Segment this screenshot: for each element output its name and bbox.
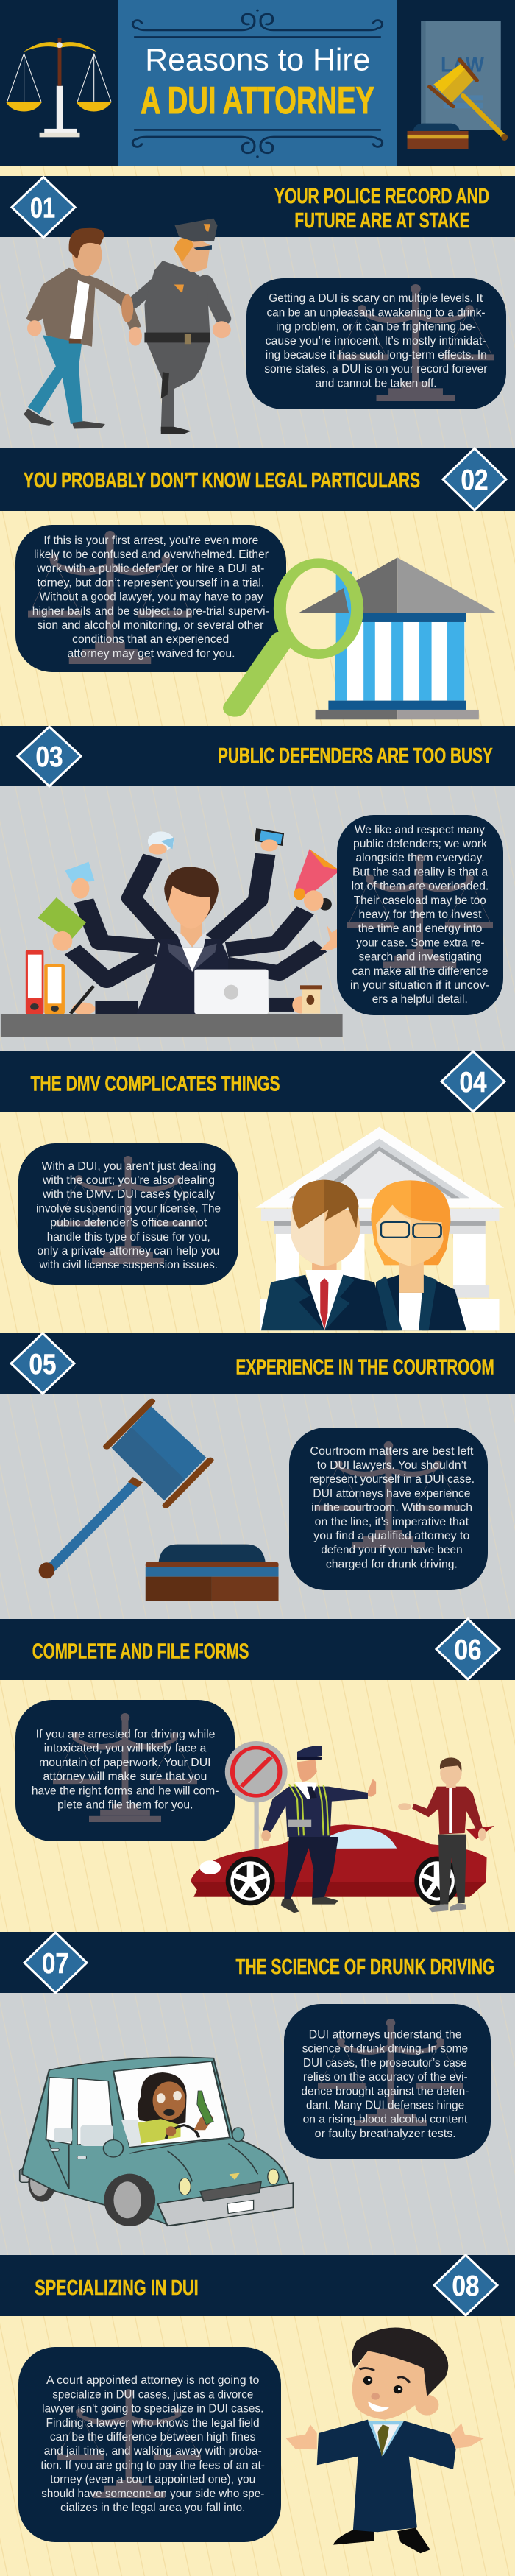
text bubble: and jail time, and walking away with proba- (44, 2445, 262, 2457)
text bubble: If this is your first arrest, you’re even more (43, 534, 258, 547)
text bubble: tion. If you are going to pay the fees of an at- (40, 2459, 265, 2471)
title (141, 43, 374, 122)
watermark: scales (28, 531, 192, 664)
text bubble: on the line, it’s imperative that (315, 1516, 469, 1528)
text bubble: attorney may get waived for you. (68, 647, 235, 660)
panel: reason 6 (0, 1619, 515, 1932)
text bubble: can be an unpleasant awakening to a drink- (266, 306, 486, 319)
panel: reason 5 (0, 1333, 515, 1619)
text bubble: some states, a DUI is on your record forever (264, 363, 487, 375)
text bubble: specialize in DUI cases, just as a divorce (52, 2388, 253, 2401)
badge: 02 (443, 448, 506, 510)
text bubble: DUI cases, the prosecutor’s case (303, 2057, 467, 2069)
icon: scales of justice (6, 38, 112, 137)
text bubble: on a rising blood alcohol content (303, 2114, 468, 2126)
badge: 04: 04 (459, 1067, 487, 1098)
text bubble: higher bails and be subject to pre-trial supervi- (32, 605, 269, 618)
panel: reason 4 (0, 1051, 515, 1333)
text bubble (15, 1700, 235, 1841)
badge: 06 (436, 1619, 500, 1679)
watermark: scales (337, 284, 494, 401)
text bubble: lot of them are overloaded. (352, 881, 489, 893)
text bubble: attorney will make sure that you (43, 1771, 207, 1783)
text bubble: alongside them everyday. (356, 852, 484, 864)
text bubble: conditions that an experienced (72, 633, 229, 646)
text bubble (246, 278, 506, 409)
badge: 06: 06 (455, 1634, 481, 1666)
text bubble: search and investigating (359, 951, 482, 964)
text bubble: only a private attorney can help you (37, 1245, 219, 1257)
illustration: gavel and block (39, 1401, 279, 1601)
title ornament: top flourish (132, 10, 383, 38)
text bubble: torney, but don’t represent yourself in a trial. (37, 576, 264, 589)
watermark: scales (316, 1441, 461, 1548)
icon: law book and gavel (408, 21, 508, 149)
text bubble: ing problem, or it can be frightening be- (276, 321, 476, 334)
text bubble (337, 815, 503, 1015)
text bubble: involve suspending your license. The (36, 1202, 221, 1215)
text bubble: or faulty breathalyzer tests. (315, 2128, 456, 2140)
header banner (0, 0, 515, 166)
text bubble: should have someone on your side who spe- (41, 2488, 264, 2500)
text bubble: public defenders; we work (353, 838, 487, 850)
text bubble: mountain of paperwork. Your DUI (39, 1757, 211, 1769)
panel: reason 7 (0, 1932, 515, 2255)
text bubble: If you are arrested for driving while (36, 1729, 216, 1740)
title: Reasons to Hire (145, 43, 370, 78)
badge: 07 (24, 1933, 87, 1993)
text bubble (284, 2004, 491, 2159)
text bubble: Their caseload may be too (354, 894, 486, 907)
title ornament: bottom flourish (132, 130, 383, 158)
text bubble: you find a qualified attorney to (313, 1530, 469, 1542)
text bubble: work with a public defender or hire a DUI at- (36, 562, 264, 575)
illustration: man and police officer (24, 219, 231, 434)
badge: 02: 02 (461, 465, 489, 496)
text bubble: can be the difference between high fines (50, 2431, 256, 2443)
panel: reason 1 (0, 166, 515, 448)
watermark: scales (53, 1713, 197, 1822)
illustration: multitasking attorney at desk (1, 828, 343, 1037)
watermark: scales (57, 2389, 201, 2498)
text bubble: lawyer isn't going to specialize in DUI cases. (42, 2403, 263, 2416)
text bubble: dant. Many DUI defenses hinge (306, 2100, 464, 2111)
badge: 04 (441, 1051, 505, 1112)
text bubble: have the right forms and he will com- (32, 1785, 219, 1797)
badge: 05 (11, 1333, 74, 1394)
badge: 01: 01 (30, 193, 55, 224)
text bubble: ing because it has such long-term effects. In (266, 349, 487, 361)
text bubble: dence brought against the defen- (301, 2085, 469, 2097)
text bubble: DUI attorneys have experience (313, 1487, 470, 1500)
text bubble: cializes in the legal area you fall into. (60, 2502, 245, 2514)
text bubble: With a DUI, you aren’t just dealing (42, 1160, 216, 1173)
text bubble: in the courtroom. With so much (311, 1502, 472, 1514)
badge: 05: 05 (29, 1349, 56, 1380)
panel: reason 8 (0, 2255, 515, 2576)
text bubble: intoxicated, you will likely face a (44, 1743, 207, 1755)
text bubble: plete and file them for you. (57, 1799, 193, 1811)
badge: 07: 07 (42, 1948, 69, 1980)
text bubble: But the sad reality is that a (352, 866, 488, 878)
text bubble: defend you if you have been (321, 1544, 463, 1556)
illustration: smiling attorney in robe (285, 2327, 484, 2553)
text bubble: science of drunk driving. In some (302, 2043, 468, 2055)
illustration: courthouse and magnifying glass (235, 557, 496, 719)
watermark: scales (347, 854, 493, 968)
watermark: scales (56, 1156, 200, 1264)
text bubble: to DUI lawyers. You shouldn’t (317, 1459, 467, 1472)
text bubble: sion and alcohol monitoring, or several other (37, 619, 263, 632)
text bubble: ers a helpful detail. (372, 993, 468, 1006)
title: A DUI ATTORNEY (141, 80, 374, 122)
badge: 03: 03 (35, 741, 63, 773)
text bubble: Without a good lawyer, you may have to pay (40, 591, 263, 604)
text bubble: DUI attorneys understand the (309, 2029, 462, 2041)
text bubble (289, 1428, 488, 1590)
badge: 08 (434, 2255, 497, 2315)
text bubble: with the DMV. DUI cases typically (42, 1188, 215, 1201)
text bubble: in your situation if it uncov- (350, 979, 489, 992)
text bubble: charged for drunk driving. (326, 1558, 458, 1570)
heading: COMPLETE AND FILE FORMS (32, 1640, 249, 1663)
text bubble: relies on the accuracy of the evi- (303, 2071, 468, 2083)
badge: 03 (18, 727, 81, 786)
text bubble: represent yourself in a DUI case. (309, 1473, 475, 1486)
text bubble: cause you’re innocent. It’s mostly intimidat- (266, 335, 486, 347)
heading: THE DMV COMPLICATES THINGS (31, 1073, 280, 1096)
text bubble (18, 2347, 281, 2542)
illustration: two lawyers before a courthouse (255, 1127, 504, 1330)
text bubble (15, 525, 286, 672)
panel: reason 3 (0, 726, 515, 1051)
text bubble: Finding a lawyer who knows the legal field (46, 2417, 260, 2429)
text bubble: heavy for them to invest (359, 908, 482, 921)
icon: law book and gavel: LAW (441, 54, 485, 77)
text bubble: likely to be confused and overwhelmed. Either (34, 548, 269, 561)
illustration: drunk driver in teal car (20, 2057, 294, 2226)
text bubble: with civil license suspension issues. (39, 1259, 218, 1271)
text bubble: can make all the difference (352, 965, 488, 978)
text bubble: torney (even a court appointed one), you (50, 2474, 255, 2486)
panel: reason 2 (0, 448, 515, 726)
text bubble: handle this type of issue for you, (47, 1231, 210, 1243)
heading (274, 185, 489, 233)
badge: 01 (12, 177, 75, 237)
text bubble: Courtroom matters are best left (310, 1445, 474, 1458)
text bubble: the time and energy into (358, 922, 482, 935)
text bubble: public defender’s office cannot (50, 1217, 207, 1229)
text bubble: and cannot be taken off. (316, 377, 437, 389)
illustration: officer, stop sign, red car and driver (191, 1741, 494, 1913)
watermark: scales (318, 2019, 464, 2126)
text bubble: A court appointed attorney is not going to (46, 2374, 259, 2387)
text bubble (18, 1143, 238, 1285)
badge: 08: 08 (452, 2270, 480, 2302)
text bubble: your case. Some extra re- (356, 936, 484, 949)
text bubble: Getting a DUI is scary on multiple levels. It (269, 292, 483, 305)
text bubble: with the court; you’re also dealing (42, 1174, 215, 1187)
heading: SPECIALIZING IN DUI (35, 2276, 199, 2300)
text bubble: We like and respect many (355, 824, 485, 836)
